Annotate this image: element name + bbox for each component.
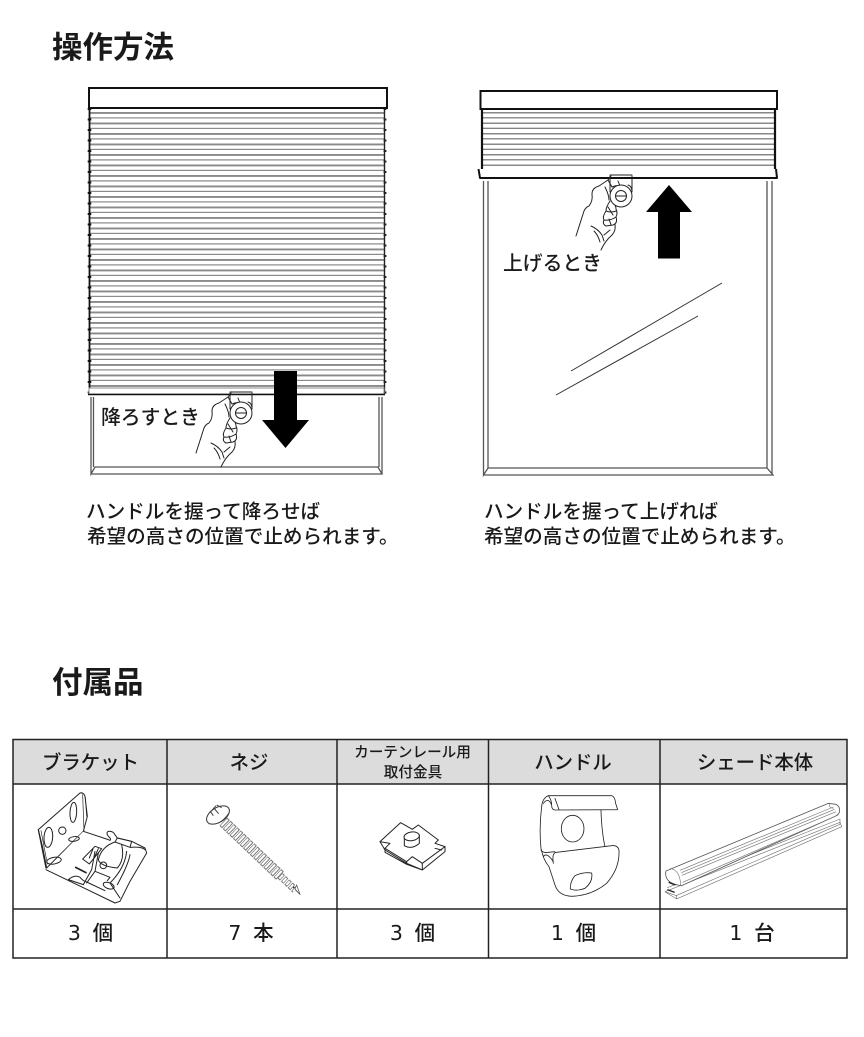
window frame left	[91, 397, 382, 474]
header: ネジ: ネジ	[230, 746, 268, 775]
caption: raising: ハンドルを握って上げれば	[484, 495, 719, 524]
caption: lowering: 希望の高さの位置で止められます。	[87, 520, 399, 549]
table: accessories	[13, 739, 847, 958]
title: 付属品: 付属品	[52, 658, 144, 702]
arrow: down	[262, 371, 309, 448]
count: ネジ 7本: 7 本	[228, 916, 274, 946]
header row background	[13, 739, 847, 784]
count: ブラケット 3個: 3 個	[68, 916, 113, 946]
glass reflection lines	[556, 283, 722, 395]
label: 上げるとき: 上げるとき	[503, 247, 602, 276]
count: ハンドル 1個: 1 個	[551, 916, 596, 946]
headrail left	[89, 88, 387, 108]
panel: lowering the shade	[88, 88, 387, 474]
icon: hand gripping handle	[576, 175, 632, 250]
count: シェード本体 1台: 1 台	[729, 916, 775, 946]
header: ブラケット: ブラケット	[42, 746, 139, 775]
caption: raising: 希望の高さの位置で止められます。	[484, 520, 796, 549]
bottom rail right	[478, 169, 777, 178]
header: カーテンレール用取付金具: 取付金具	[384, 761, 442, 782]
icon: curtain rail mount	[380, 823, 445, 870]
icon: handle	[540, 796, 619, 896]
table grid	[13, 739, 847, 958]
title: 操作方法: 操作方法	[52, 23, 174, 67]
header: シェード本体: シェード本体	[697, 746, 813, 775]
header: ハンドル: ハンドル	[534, 746, 612, 775]
arrow: up	[646, 185, 692, 258]
pleated shade right	[482, 109, 775, 170]
window frame right	[484, 181, 773, 475]
icon: bracket	[38, 793, 147, 903]
icon: shade body	[665, 803, 842, 899]
headrail right	[480, 91, 777, 109]
bottom rail left	[88, 388, 385, 394]
header: カーテンレール用取付金具: カーテンレール用	[354, 741, 471, 762]
label: 降ろすとき: 降ろすとき	[101, 401, 200, 430]
pleated shade left	[90, 108, 385, 394]
icon: screw	[203, 802, 300, 894]
panel: raising the shade	[478, 91, 777, 475]
count: 取付金具 3個: 3 個	[390, 916, 435, 946]
caption: lowering: ハンドルを握って降ろせば	[86, 495, 321, 524]
icon: hand gripping handle	[196, 392, 252, 467]
